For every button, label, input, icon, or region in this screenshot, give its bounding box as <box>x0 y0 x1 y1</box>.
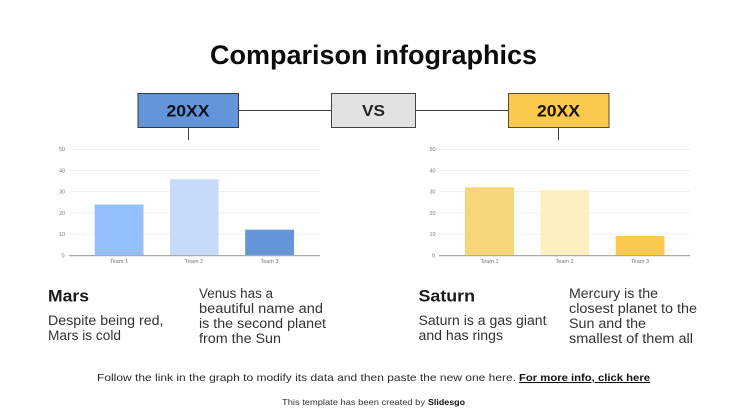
footer note: For more info, click here <box>519 372 650 384</box>
bar: right team 3 <box>616 236 664 256</box>
axis labels: right chart: Team 2 <box>556 259 574 265</box>
VS box <box>332 94 416 128</box>
bar: right team 1 <box>465 187 514 256</box>
axis labels: left chart: 30 <box>59 190 65 196</box>
bar: left team 3 <box>245 230 294 256</box>
axis labels: right chart: 20 <box>430 211 436 217</box>
axis labels: left chart: 10 <box>59 232 65 238</box>
axis labels: right chart: Team 3 <box>631 259 649 265</box>
text: Venus description: from the Sun <box>199 331 281 346</box>
text: Venus description <box>199 286 326 346</box>
bar: left team 1 <box>95 204 144 256</box>
connector: left box to VS <box>238 110 331 112</box>
text: Mercury description: Mercury is the <box>569 286 658 301</box>
text: Saturn description: Saturn is a gas giant <box>418 313 547 328</box>
axis labels: left chart <box>59 147 279 265</box>
axis labels: right chart: 10 <box>430 232 436 238</box>
axis labels: right chart: 0 <box>432 254 435 260</box>
axis labels: right chart: 40 <box>430 168 436 174</box>
heading: Mars: Mars <box>48 288 89 306</box>
text: Mercury description <box>569 286 697 346</box>
right year box: 20XX <box>537 102 580 120</box>
credit line <box>282 398 465 407</box>
bar: left team 2 <box>170 179 219 256</box>
footer note <box>97 372 650 384</box>
heading: Saturn: Saturn <box>418 288 475 306</box>
text: Venus description: beautiful name and <box>199 301 323 316</box>
connector: left box stem <box>188 128 190 140</box>
text: Mars description: Mars is cold <box>48 328 121 343</box>
text: Saturn description: and has rings <box>418 328 503 343</box>
axis labels: left chart: Team 3 <box>260 259 279 265</box>
text: Mercury description: closest planet to the <box>569 301 697 316</box>
text: Mercury description: Sun and the <box>569 316 646 331</box>
axis labels: right chart: 50 <box>430 147 436 153</box>
credit line: This template has been created by <box>282 398 425 407</box>
bar chart: right <box>430 147 690 265</box>
left year box: 20XX <box>166 102 210 120</box>
axis labels: left chart: 0 <box>62 254 65 260</box>
axis labels: left chart: Team 2 <box>185 259 203 265</box>
credit line: Slidesgo <box>428 398 465 407</box>
VS box: VS <box>362 103 385 120</box>
bar chart: left <box>59 147 320 265</box>
connector: right box stem <box>558 128 560 140</box>
axis labels: left chart: 40 <box>59 168 65 174</box>
title: Comparison infographics <box>210 40 537 70</box>
axis labels: left chart: 20 <box>59 211 65 217</box>
text: Venus description: is the second planet <box>199 316 326 331</box>
axis labels: left chart: Team 1 <box>110 259 128 265</box>
axis labels: left chart: 50 <box>59 147 65 153</box>
text: Mars description <box>48 313 164 343</box>
right year box <box>508 94 609 128</box>
text: Saturn description <box>418 313 547 343</box>
text: Venus description: Venus has a <box>199 286 273 301</box>
connector: VS to right box <box>416 110 508 112</box>
text: Mercury description: smallest of them all <box>569 331 693 346</box>
text: Mars description: Despite being red, <box>48 313 164 328</box>
bar: right team 2 <box>540 190 589 256</box>
axis labels: right chart <box>430 147 649 265</box>
left year box <box>138 94 238 128</box>
axis labels: right chart: 30 <box>430 190 436 196</box>
footer note: Follow the link in the graph to modify its data and then paste the new one here. <box>97 372 516 384</box>
axis labels: right chart: Team 1 <box>480 259 499 265</box>
